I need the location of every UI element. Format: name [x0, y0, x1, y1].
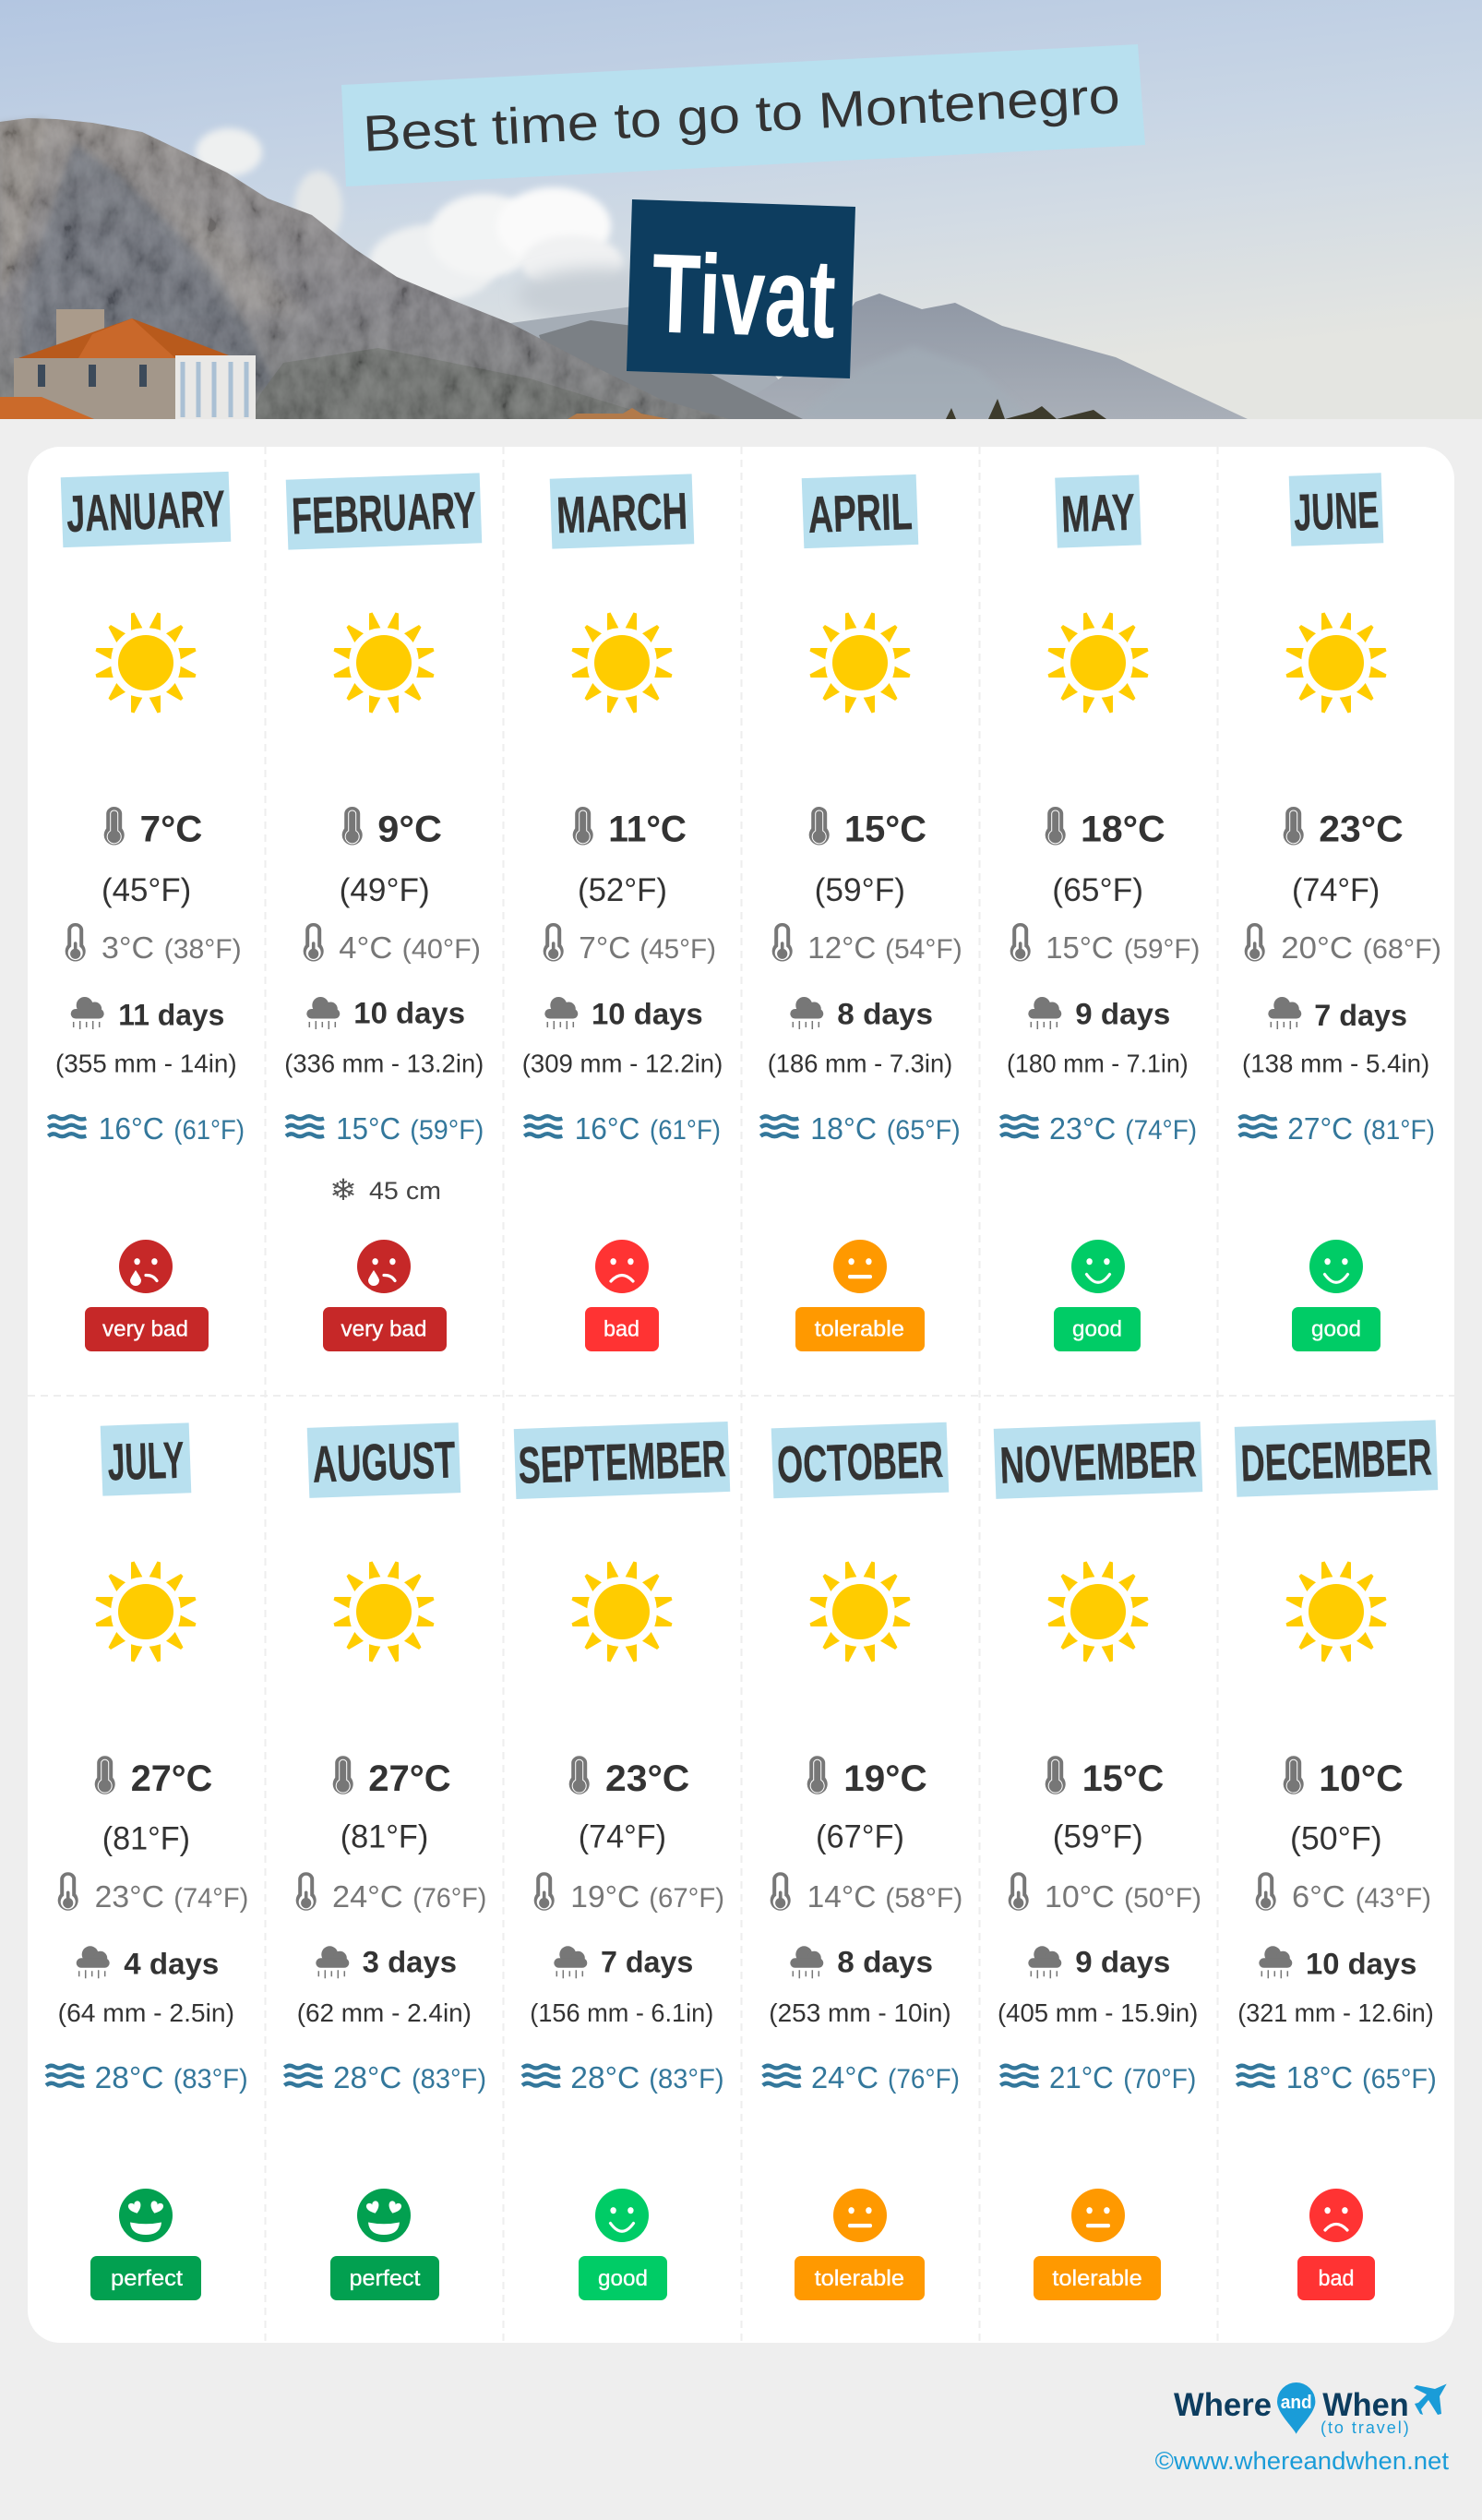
rating: tolerable	[795, 2189, 925, 2300]
low temperature: 20°C	[1281, 930, 1353, 965]
high temperature in Fahrenheit: (81°F)	[102, 1820, 190, 1856]
rainfall: (62 mm - 2.4in)	[297, 1998, 472, 2027]
sea temperature: 18°C	[1286, 2060, 1353, 2094]
month heading: November	[994, 1422, 1202, 1499]
low temperature	[1245, 923, 1441, 965]
rainy days	[71, 997, 224, 1032]
rainy days: 9 days	[1075, 997, 1170, 1030]
month heading: March	[550, 474, 694, 549]
rainfall: (336 mm - 13.2in)	[284, 1050, 484, 1078]
month heading: July	[101, 1422, 191, 1496]
sea temperature	[284, 2060, 486, 2094]
panel: March	[522, 474, 723, 1351]
rainfall: (180 mm - 7.1in)	[1007, 1050, 1189, 1078]
low temperature: 15°C	[1046, 930, 1114, 965]
low temperature	[296, 1872, 486, 1914]
rainy days: 8 days	[837, 1946, 933, 1979]
sea temperature	[1000, 2060, 1196, 2094]
footer logo: Where and When: (to travel)	[1321, 2418, 1409, 2437]
footer logo: Where and When: When	[1322, 2387, 1409, 2423]
high temperature in Fahrenheit: (74°F)	[579, 1819, 666, 1855]
low temperature: 19°C	[570, 1879, 639, 1914]
snowfall: ❄	[329, 1173, 357, 1206]
footer logo: Where and When	[1174, 2382, 1447, 2437]
rainfall: (253 mm - 10in)	[769, 1998, 951, 2027]
header photo: Tivat mountains	[0, 0, 1482, 419]
rating: perfect: perfect	[111, 2266, 183, 2291]
month heading: October	[771, 1422, 949, 1498]
footer logo: Where and When: Where	[1174, 2387, 1272, 2423]
rainfall: (405 mm - 15.9in)	[998, 1998, 1198, 2027]
high temperature: 10°C	[1319, 1758, 1404, 1799]
rainfall: (186 mm - 7.3in)	[768, 1050, 952, 1078]
rating: good: good	[598, 2266, 648, 2291]
panel: November	[994, 1422, 1202, 2300]
panel: June	[1239, 473, 1441, 1351]
rating: bad	[1297, 2189, 1375, 2300]
rainfall: (156 mm - 6.1in)	[530, 1998, 713, 2027]
low temperature: 6°C	[1292, 1879, 1345, 1914]
panel: monthly climate card	[28, 447, 1454, 2343]
high temperature	[342, 807, 442, 850]
high temperature	[569, 1756, 689, 1799]
month heading: September: SEPTEMBER	[518, 1429, 727, 1494]
rating: good	[579, 2189, 667, 2300]
high temperature in Fahrenheit: (52°F)	[578, 872, 667, 908]
low temperature: 4°C	[339, 930, 392, 965]
sea temperature: 28°C	[333, 2060, 401, 2094]
rating: bad: bad	[604, 1317, 639, 1342]
rainy days: 3 days	[363, 1946, 457, 1979]
high temperature: 18°C	[1081, 810, 1165, 850]
rating: good: good	[1311, 1317, 1361, 1342]
rainy days: 7 days	[601, 1946, 693, 1979]
low temperature: (68°F)	[1363, 934, 1441, 965]
rating: perfect	[330, 2189, 439, 2300]
sea temperature	[1237, 2060, 1437, 2094]
month heading: April: APRIL	[807, 482, 914, 544]
panel: December	[1235, 1420, 1438, 2300]
low temperature: (59°F)	[1124, 934, 1200, 965]
sea temperature	[286, 1111, 484, 1146]
low temperature	[1009, 1872, 1201, 1914]
rating: bad: bad	[1318, 2266, 1355, 2291]
sea temperature: 16°C	[99, 1111, 164, 1146]
month heading: November: NOVEMBER	[999, 1429, 1198, 1494]
sea temperature	[524, 1111, 721, 1146]
sea temperature: (61°F)	[650, 1115, 721, 1146]
sea temperature: 18°C	[810, 1111, 877, 1146]
sea temperature	[48, 1111, 245, 1146]
rainy days	[554, 1946, 693, 1979]
sea temperature: (65°F)	[887, 1115, 961, 1146]
sea temperature: (70°F)	[1123, 2064, 1196, 2094]
sea temperature: 16°C	[575, 1111, 639, 1146]
rainy days: 7 days	[1314, 999, 1407, 1032]
sea temperature: 28°C	[95, 2060, 163, 2094]
sea temperature: 15°C	[336, 1111, 400, 1146]
rainy days: 10 days	[353, 996, 465, 1029]
rainy days	[77, 1946, 219, 1980]
month heading: May	[1055, 474, 1141, 548]
panel: April	[760, 474, 962, 1351]
rating: tolerable: tolerable	[1052, 2266, 1142, 2291]
city name box: Tivat: Tivat	[650, 230, 838, 362]
sea temperature: 21°C	[1049, 2060, 1114, 2094]
low temperature: 10°C	[1045, 1879, 1115, 1914]
sea temperature: (76°F)	[888, 2064, 960, 2094]
icon: sun	[810, 613, 910, 713]
month heading: June: JUNE	[1293, 480, 1380, 542]
low temperature	[58, 1872, 248, 1914]
rainy days: 10 days	[1306, 1947, 1416, 1980]
sea temperature: (81°F)	[1363, 1115, 1435, 1146]
rainfall: (355 mm - 14in)	[55, 1050, 237, 1078]
title banner: Best time to go to Montenegro	[362, 66, 1121, 162]
high temperature	[1046, 1756, 1164, 1799]
low temperature: 14°C	[807, 1879, 876, 1914]
sea temperature: (74°F)	[1125, 1115, 1197, 1146]
low temperature: 7°C	[579, 930, 630, 965]
high temperature: 23°C	[605, 1758, 689, 1799]
website credit: ©www.whereandwhen.net	[1155, 2447, 1449, 2475]
sea temperature: 23°C	[1049, 1111, 1116, 1146]
snowfall: 45 cm	[369, 1177, 441, 1205]
month heading: January: JANUARY	[66, 479, 226, 543]
high temperature: 27°C	[368, 1758, 451, 1799]
high temperature	[1046, 807, 1165, 850]
sea temperature	[763, 2060, 960, 2094]
month heading: August	[307, 1422, 460, 1498]
low temperature: (38°F)	[164, 934, 242, 965]
high temperature: 11°C	[608, 810, 687, 850]
panel: January	[48, 472, 245, 1351]
title banner	[341, 44, 1145, 186]
icon: sun	[334, 1562, 434, 1662]
icon: sun	[810, 1562, 910, 1662]
high temperature: 7°C	[140, 810, 202, 850]
rating: very bad: very bad	[341, 1317, 426, 1342]
high temperature in Fahrenheit: (45°F)	[102, 872, 191, 908]
rating: perfect	[90, 2189, 201, 2300]
icon: sun	[1286, 1562, 1386, 1662]
rating: very bad	[323, 1240, 447, 1351]
rainy days	[1028, 997, 1170, 1030]
sea temperature: 24°C	[811, 2060, 878, 2094]
high temperature in Fahrenheit: (65°F)	[1052, 872, 1143, 908]
rating: very bad	[85, 1240, 209, 1351]
low temperature	[534, 1872, 724, 1914]
rating: good	[1292, 1240, 1380, 1351]
month heading: June	[1289, 473, 1383, 546]
sea temperature: (83°F)	[412, 2064, 486, 2094]
icon: sun	[96, 1562, 196, 1662]
rainy days	[544, 997, 703, 1030]
month heading: February	[286, 473, 482, 550]
rainy days	[316, 1946, 457, 1979]
high temperature in Fahrenheit: (59°F)	[1053, 1819, 1143, 1855]
month heading: October: OCTOBER	[776, 1430, 944, 1494]
low temperature	[544, 923, 716, 965]
panel: August	[284, 1422, 486, 2300]
rainfall: (138 mm - 5.4in)	[1242, 1050, 1429, 1078]
rainy days: 9 days	[1075, 1946, 1170, 1979]
rainy days	[306, 996, 465, 1029]
panel: September	[514, 1422, 730, 2300]
low temperature: (54°F)	[885, 934, 962, 965]
month heading: May: MAY	[1060, 483, 1136, 543]
high temperature in Fahrenheit: (59°F)	[815, 872, 905, 908]
panel: May	[1000, 474, 1200, 1351]
rainy days: 10 days	[592, 997, 703, 1030]
rainy days	[1259, 1946, 1416, 1980]
icon: sun	[572, 613, 672, 713]
rating: tolerable: tolerable	[815, 2266, 904, 2291]
icon: sun	[1048, 1562, 1148, 1662]
high temperature	[807, 1756, 927, 1799]
high temperature in Fahrenheit: (67°F)	[816, 1819, 904, 1855]
month heading: February: FEBRUARY	[291, 481, 477, 545]
rainy days	[790, 1946, 933, 1979]
high temperature	[1284, 807, 1404, 850]
rating: good: good	[1072, 1317, 1122, 1342]
low temperature: (43°F)	[1356, 1883, 1431, 1914]
icon: sun	[1286, 613, 1386, 713]
low temperature: (40°F)	[402, 934, 481, 965]
sea temperature: (65°F)	[1362, 2064, 1437, 2094]
rating: very bad: very bad	[102, 1317, 188, 1342]
rating: good	[1054, 1240, 1141, 1351]
low temperature: (76°F)	[412, 1883, 486, 1914]
high temperature	[1284, 1756, 1404, 1799]
rating: tolerable	[795, 1240, 925, 1351]
month heading: July: JULY	[106, 1431, 185, 1491]
month heading: January	[61, 472, 231, 547]
low temperature: (67°F)	[649, 1883, 724, 1914]
rainy days	[1268, 997, 1407, 1032]
rainfall: (309 mm - 12.2in)	[522, 1050, 723, 1078]
high temperature	[333, 1756, 451, 1799]
rating: tolerable	[1034, 2189, 1161, 2300]
high temperature in Fahrenheit: (81°F)	[341, 1819, 428, 1855]
high temperature: 9°C	[377, 810, 442, 850]
rainy days: 11 days	[118, 999, 224, 1032]
sea temperature	[46, 2060, 248, 2094]
low temperature: (50°F)	[1124, 1883, 1201, 1914]
high temperature	[573, 807, 687, 850]
icon: sun	[96, 613, 196, 713]
rainy days: 4 days	[124, 1947, 219, 1980]
panel: October	[763, 1422, 962, 2300]
sea temperature: (61°F)	[173, 1115, 245, 1146]
high temperature	[809, 807, 926, 850]
high temperature	[104, 807, 202, 850]
low temperature	[66, 923, 242, 965]
panel: July	[46, 1422, 248, 2300]
high temperature: 23°C	[1319, 810, 1404, 850]
rainfall: (321 mm - 12.6in)	[1237, 1998, 1434, 2027]
low temperature	[1010, 923, 1200, 965]
month heading: September	[514, 1422, 730, 1499]
high temperature: 27°C	[131, 1758, 212, 1799]
panel: February	[284, 473, 484, 1351]
snowfall	[329, 1173, 441, 1206]
low temperature	[772, 923, 962, 965]
sea temperature: (83°F)	[173, 2064, 248, 2094]
rating: bad	[585, 1240, 659, 1351]
sea temperature	[522, 2060, 724, 2094]
low temperature	[1256, 1872, 1431, 1914]
sea temperature	[1000, 1111, 1197, 1146]
icon: sun	[1048, 613, 1148, 713]
high temperature in Fahrenheit: (49°F)	[340, 872, 430, 908]
high temperature in Fahrenheit: (50°F)	[1290, 1820, 1382, 1856]
low temperature: 24°C	[332, 1879, 403, 1914]
month heading: April	[802, 474, 918, 548]
rainy days	[1028, 1946, 1170, 1979]
low temperature	[771, 1872, 962, 1914]
rainy days	[790, 997, 933, 1030]
month heading: March: MARCH	[556, 482, 688, 544]
low temperature: 23°C	[95, 1879, 164, 1914]
rating: tolerable: tolerable	[815, 1317, 904, 1342]
low temperature: 12°C	[807, 930, 876, 965]
high temperature: 15°C	[1082, 1758, 1164, 1799]
footer logo: Where and When: and	[1281, 2393, 1312, 2413]
sea temperature: 27°C	[1287, 1111, 1353, 1146]
rating: perfect: perfect	[349, 2266, 421, 2291]
low temperature: (74°F)	[173, 1883, 248, 1914]
low temperature	[304, 923, 481, 965]
rainfall: (64 mm - 2.5in)	[58, 1998, 234, 2027]
sea temperature: (83°F)	[649, 2064, 724, 2094]
city name box: Tivat	[627, 199, 855, 378]
high temperature in Fahrenheit: (74°F)	[1292, 872, 1380, 908]
high temperature: 19°C	[843, 1758, 927, 1799]
low temperature: (58°F)	[885, 1883, 962, 1914]
sea temperature	[1239, 1111, 1435, 1146]
rainy days: 8 days	[837, 997, 933, 1030]
sea temperature	[760, 1111, 961, 1146]
icon: sun	[334, 613, 434, 713]
low temperature: 3°C	[102, 930, 154, 965]
sea temperature: (59°F)	[410, 1115, 484, 1146]
sea temperature: 28°C	[570, 2060, 639, 2094]
low temperature: (45°F)	[639, 934, 716, 965]
high temperature	[95, 1756, 212, 1799]
high temperature: 15°C	[844, 810, 926, 850]
icon: sun	[572, 1562, 672, 1662]
month heading: August: AUGUST	[312, 1430, 457, 1494]
